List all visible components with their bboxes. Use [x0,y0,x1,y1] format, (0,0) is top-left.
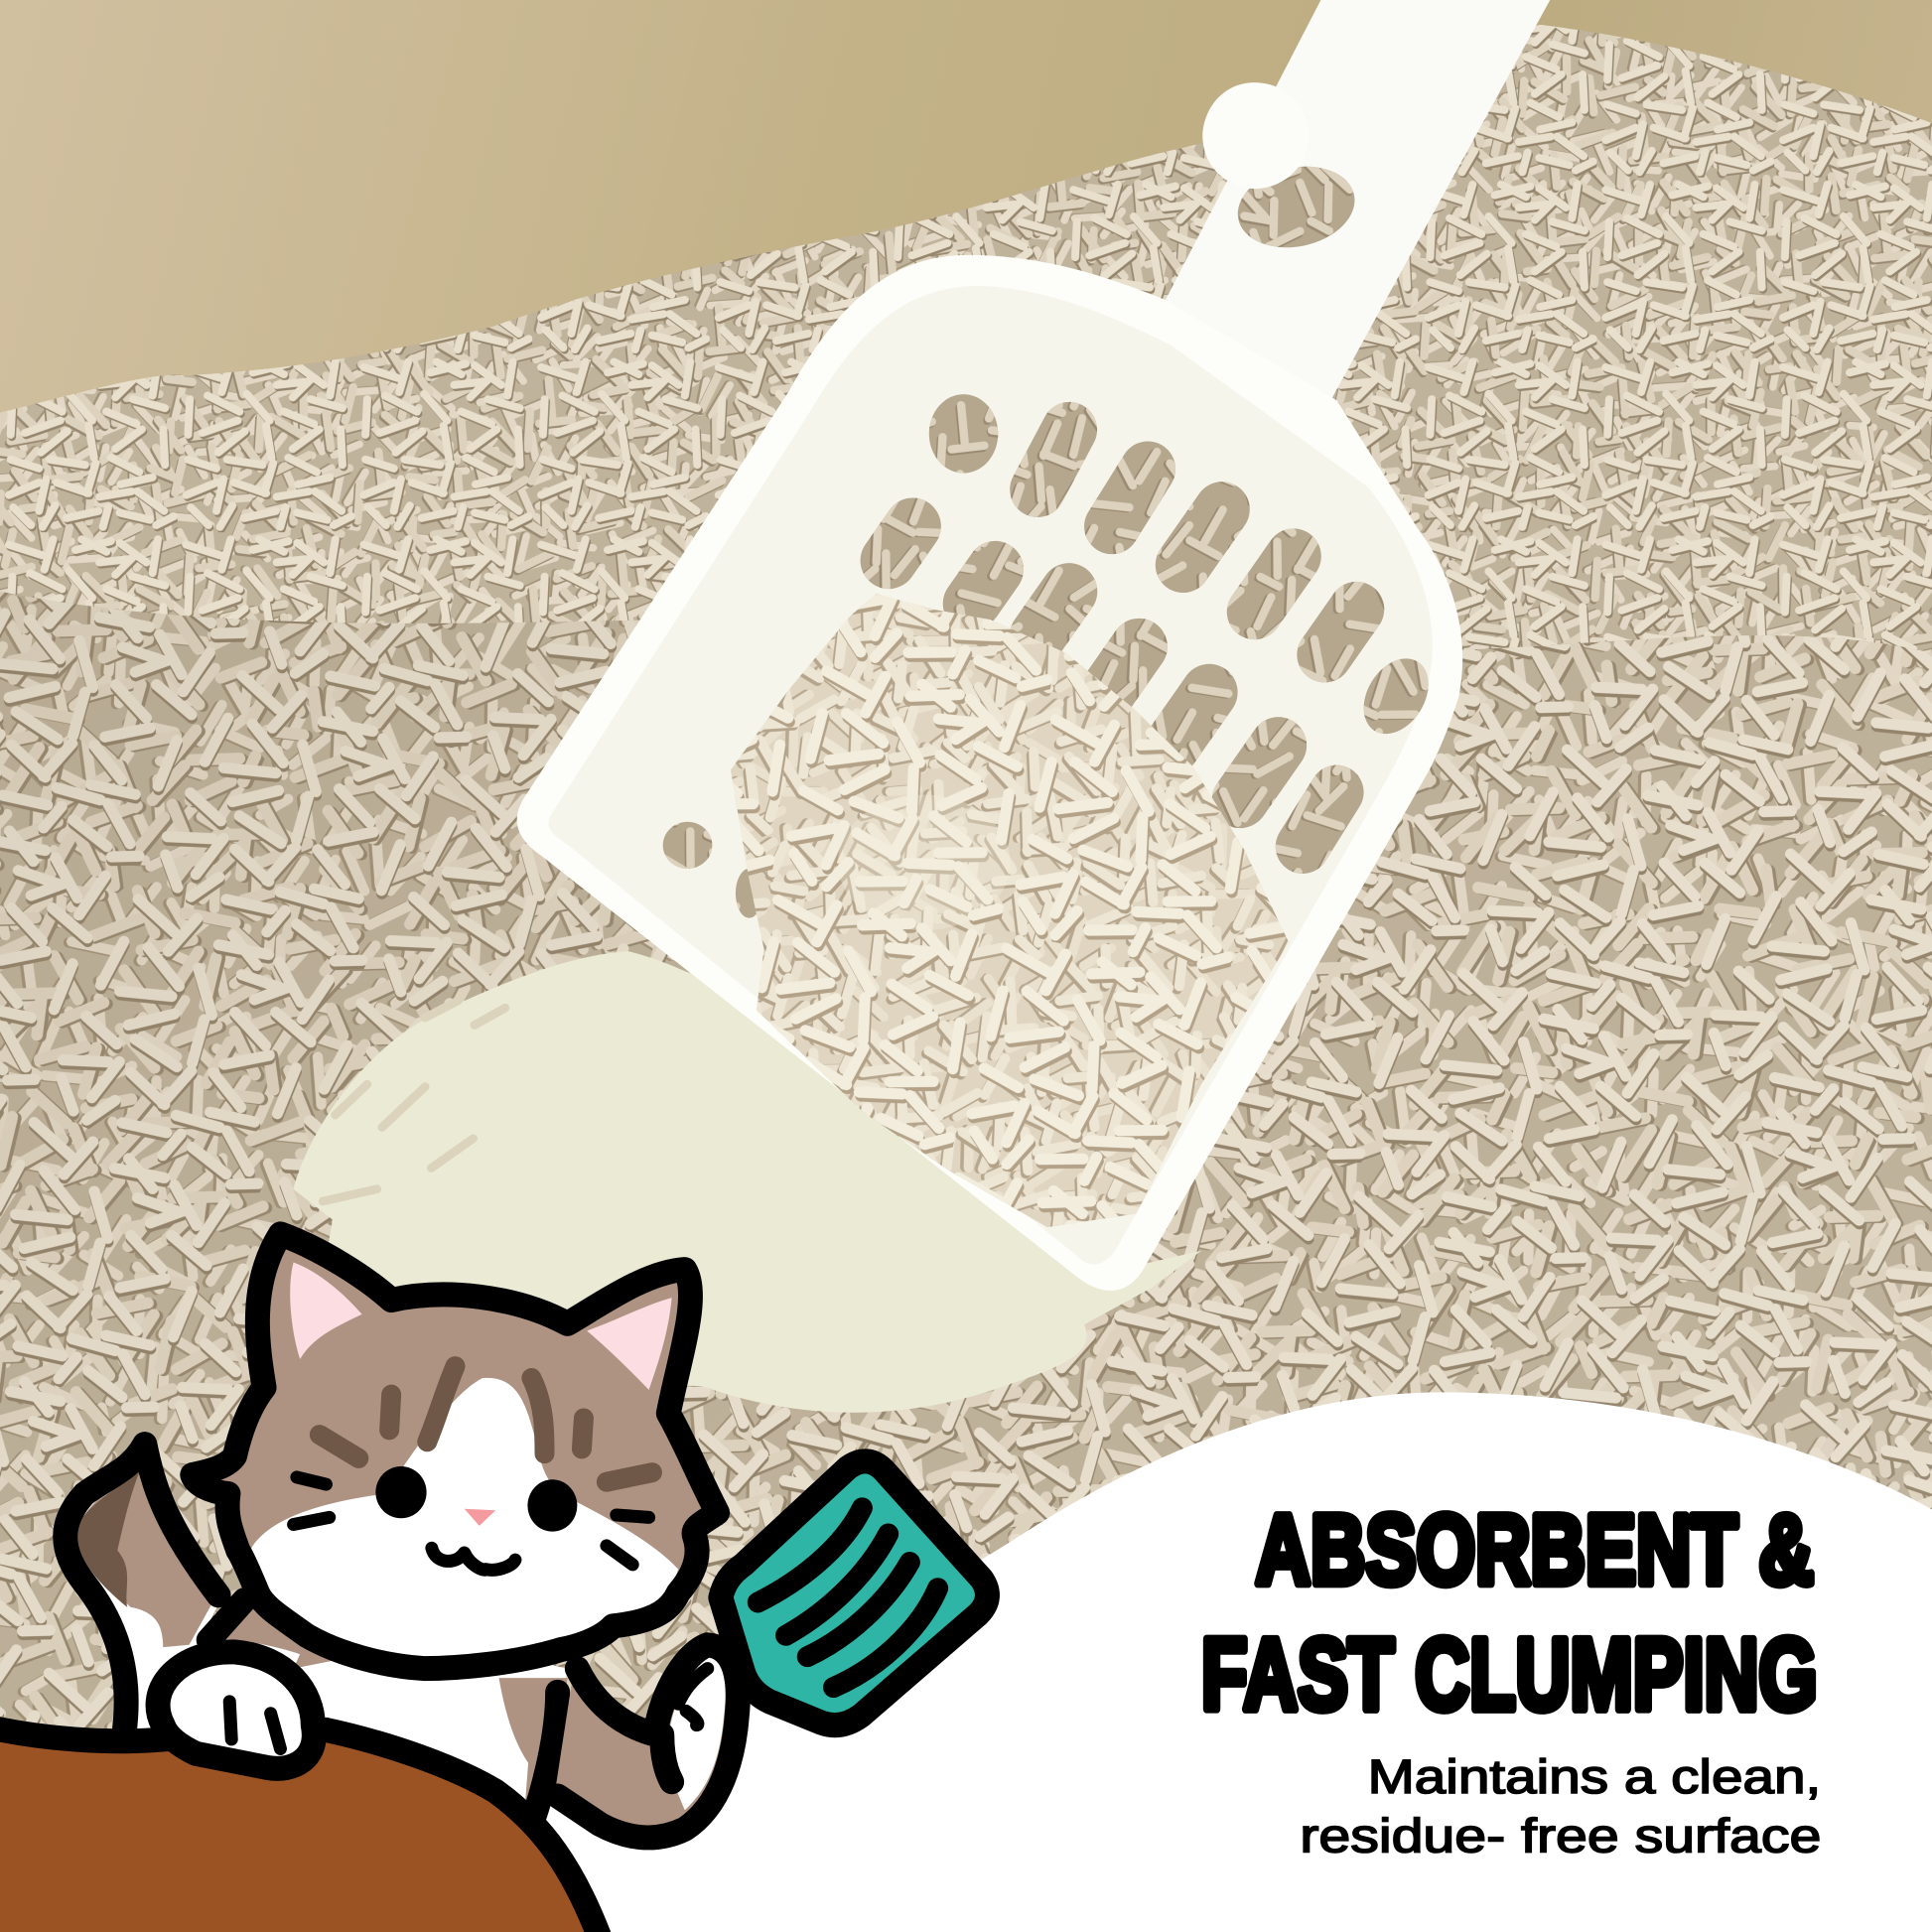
handle hole base [1230,156,1362,258]
litter bed tone overlay [0,592,665,1533]
cat body [157,1597,568,1825]
stray pellets on clean patch [323,1001,505,1201]
head outline [193,1234,718,1669]
subheading line 1: Maintains a clean, [1368,1750,1821,1804]
white muzzle and blaze [248,1378,678,1664]
nose [465,1509,495,1526]
litter bed: far pellets [0,25,1932,653]
cat left paw [158,1652,314,1768]
left eye [375,1466,427,1518]
heading [1201,1495,1818,1730]
soft clumped centre [838,794,1011,930]
left ear inner [290,1262,362,1359]
cat tail [66,1445,221,1734]
subheading [1300,1750,1821,1863]
right eye [527,1479,577,1532]
white curved text panel [492,1392,1932,1932]
whiskers [294,1477,649,1565]
right ear inner [587,1298,672,1390]
photo background: litter box wall [0,0,1932,740]
handle hole pellets [1230,156,1362,258]
handle hook knob [1202,82,1309,189]
cat head [193,1234,718,1669]
clump of litter in scoop [731,594,1289,1227]
cat mascot holding scoop [0,1234,987,1932]
scoop handle [1165,0,1550,400]
subheading line 2: residue- free surface [1300,1809,1821,1863]
head tabby stripes [320,1366,652,1482]
litter scoop [517,255,1462,1291]
brown box rim [0,1725,604,1932]
mini teal scoop [721,1461,987,1725]
scoop sieve holes base [663,392,1442,918]
mouth [432,1548,515,1570]
scoop sieve holes pellets [663,392,1442,918]
cat right arm [554,1645,738,1838]
cleared clean surface patch [293,951,1201,1413]
litter bed: near pellets [0,592,1932,1729]
scoop inner basin [548,286,1433,1265]
